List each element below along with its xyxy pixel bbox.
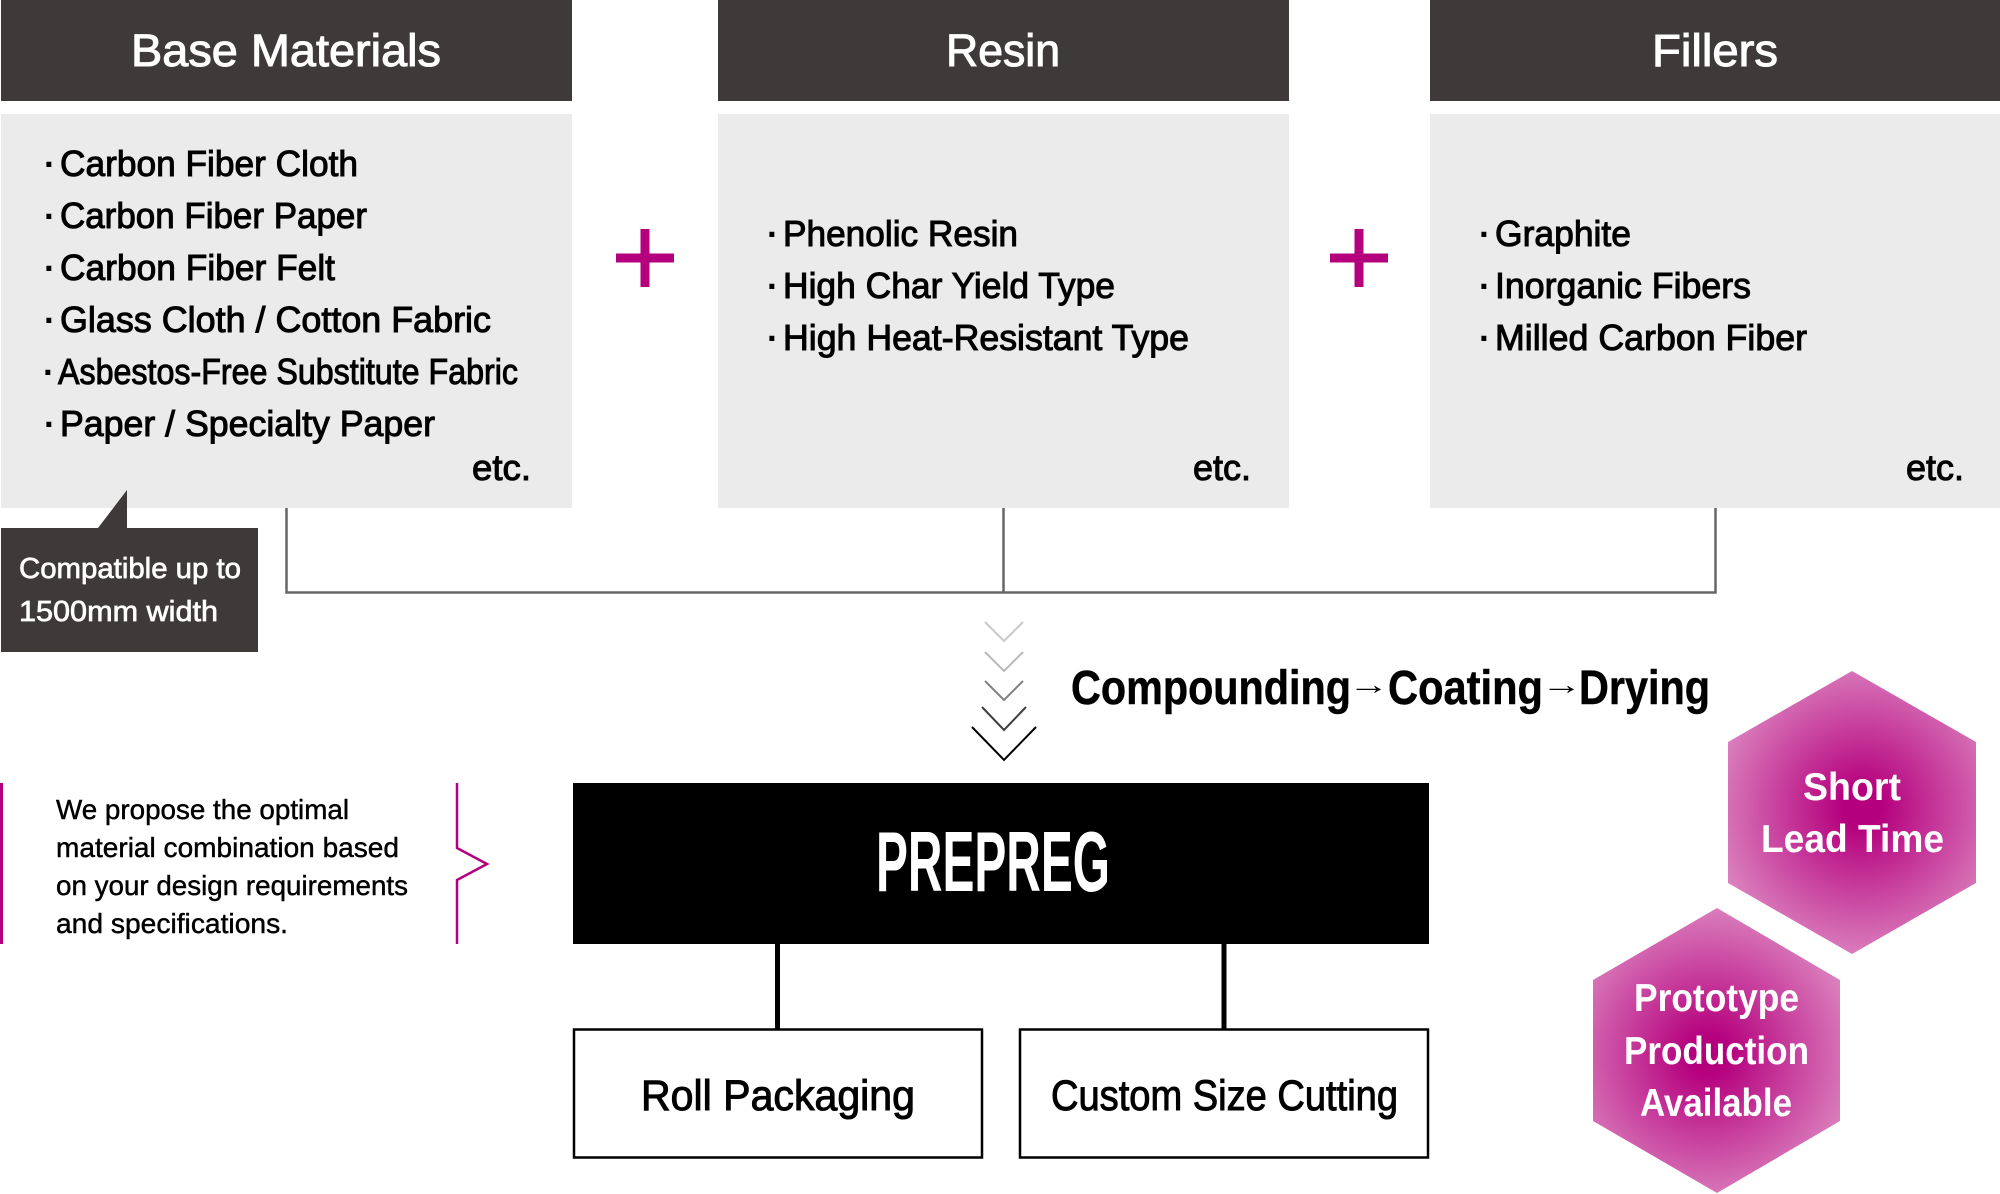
base materials list: ·	[44, 249, 56, 288]
base materials list: ·	[43, 353, 55, 392]
process steps text: →	[1541, 669, 1582, 700]
base materials list: Glass Cloth / Cotton Fabric	[60, 299, 491, 340]
callout: width: Compatible up to	[19, 553, 241, 585]
base materials header	[1, 0, 572, 101]
fillers list: ·	[1479, 215, 1491, 254]
base materials list: ·	[44, 197, 56, 236]
hexagon: short lead time: Short	[1803, 766, 1901, 809]
hexagon: prototype production available: Production	[1624, 1030, 1809, 1073]
output: custom size cutting	[1020, 1030, 1428, 1158]
fillers list	[1430, 114, 2000, 508]
hexagon: prototype production available: Available	[1640, 1082, 1792, 1125]
prepreg box: PREPREG	[876, 815, 1110, 910]
plus sign 2	[1330, 229, 1388, 287]
panel: fillers	[1430, 0, 2000, 508]
resin list: ·	[767, 319, 779, 358]
hexagon: short lead time: Lead Time	[1761, 818, 1944, 861]
process steps text: Drying	[1579, 662, 1710, 715]
output: roll packaging	[574, 1030, 982, 1158]
fillers list: ·	[1479, 267, 1491, 306]
base materials list: Carbon Fiber Felt	[60, 247, 335, 288]
proposal note with bracket: on your design requirements	[56, 870, 408, 901]
proposal note with bracket: We propose the optimal	[56, 794, 349, 825]
resin list: ·	[767, 267, 779, 306]
callout: width	[1, 490, 258, 652]
resin list	[718, 114, 1289, 508]
hexagon: short lead time	[1728, 671, 1976, 954]
hexagon: prototype production available: Prototype	[1634, 977, 1799, 1020]
base materials list: Carbon Fiber Cloth	[60, 143, 358, 184]
base materials list: Asbestos-Free Substitute Fabric	[58, 351, 518, 392]
fillers list: etc.	[1906, 447, 1964, 488]
proposal note with bracket: and specifications.	[56, 908, 288, 939]
proposal note with bracket	[2, 783, 487, 944]
resin list: High Char Yield Type	[783, 265, 1115, 306]
base materials list	[1, 114, 572, 508]
resin list: Phenolic Resin	[783, 213, 1018, 254]
stems to output boxes	[778, 944, 1224, 1030]
process steps text: Coating	[1388, 662, 1543, 715]
process steps text: →	[1348, 669, 1389, 700]
resin list: ·	[767, 215, 779, 254]
base materials list: ·	[44, 301, 56, 340]
process steps text	[1071, 662, 1710, 715]
fillers header	[1430, 0, 2000, 101]
base materials list: ·	[44, 145, 56, 184]
process steps text: Compounding	[1071, 662, 1351, 715]
panel: resin	[718, 0, 1289, 508]
connector lines	[286, 507, 1716, 592]
plus sign 1	[616, 229, 674, 287]
resin list: etc.	[1193, 447, 1251, 488]
hexagon: prototype production available	[1593, 908, 1840, 1193]
prepreg box	[573, 783, 1429, 944]
base materials list: Carbon Fiber Paper	[60, 195, 367, 236]
panel: base materials	[1, 0, 572, 508]
output: custom size cutting: Custom Size Cutting	[1051, 1072, 1398, 1120]
fillers list: ·	[1479, 319, 1491, 358]
proposal note with bracket: material combination based	[56, 832, 399, 863]
resin header	[718, 0, 1289, 101]
base materials list: ·	[44, 405, 56, 444]
arrow: downward chevrons	[972, 622, 1036, 760]
base materials list: Paper / Specialty Paper	[60, 403, 435, 444]
fillers list: Inorganic Fibers	[1495, 265, 1751, 306]
output: roll packaging: Roll Packaging	[641, 1072, 915, 1120]
base materials list: etc.	[472, 447, 531, 488]
fillers header: Fillers	[1652, 25, 1778, 76]
base materials header: Base Materials	[131, 25, 441, 76]
resin list: High Heat-Resistant Type	[783, 317, 1189, 358]
fillers list: Milled Carbon Fiber	[1495, 317, 1807, 358]
fillers list: Graphite	[1495, 213, 1631, 254]
resin header: Resin	[946, 25, 1060, 76]
callout: width: 1500mm width	[19, 596, 218, 628]
